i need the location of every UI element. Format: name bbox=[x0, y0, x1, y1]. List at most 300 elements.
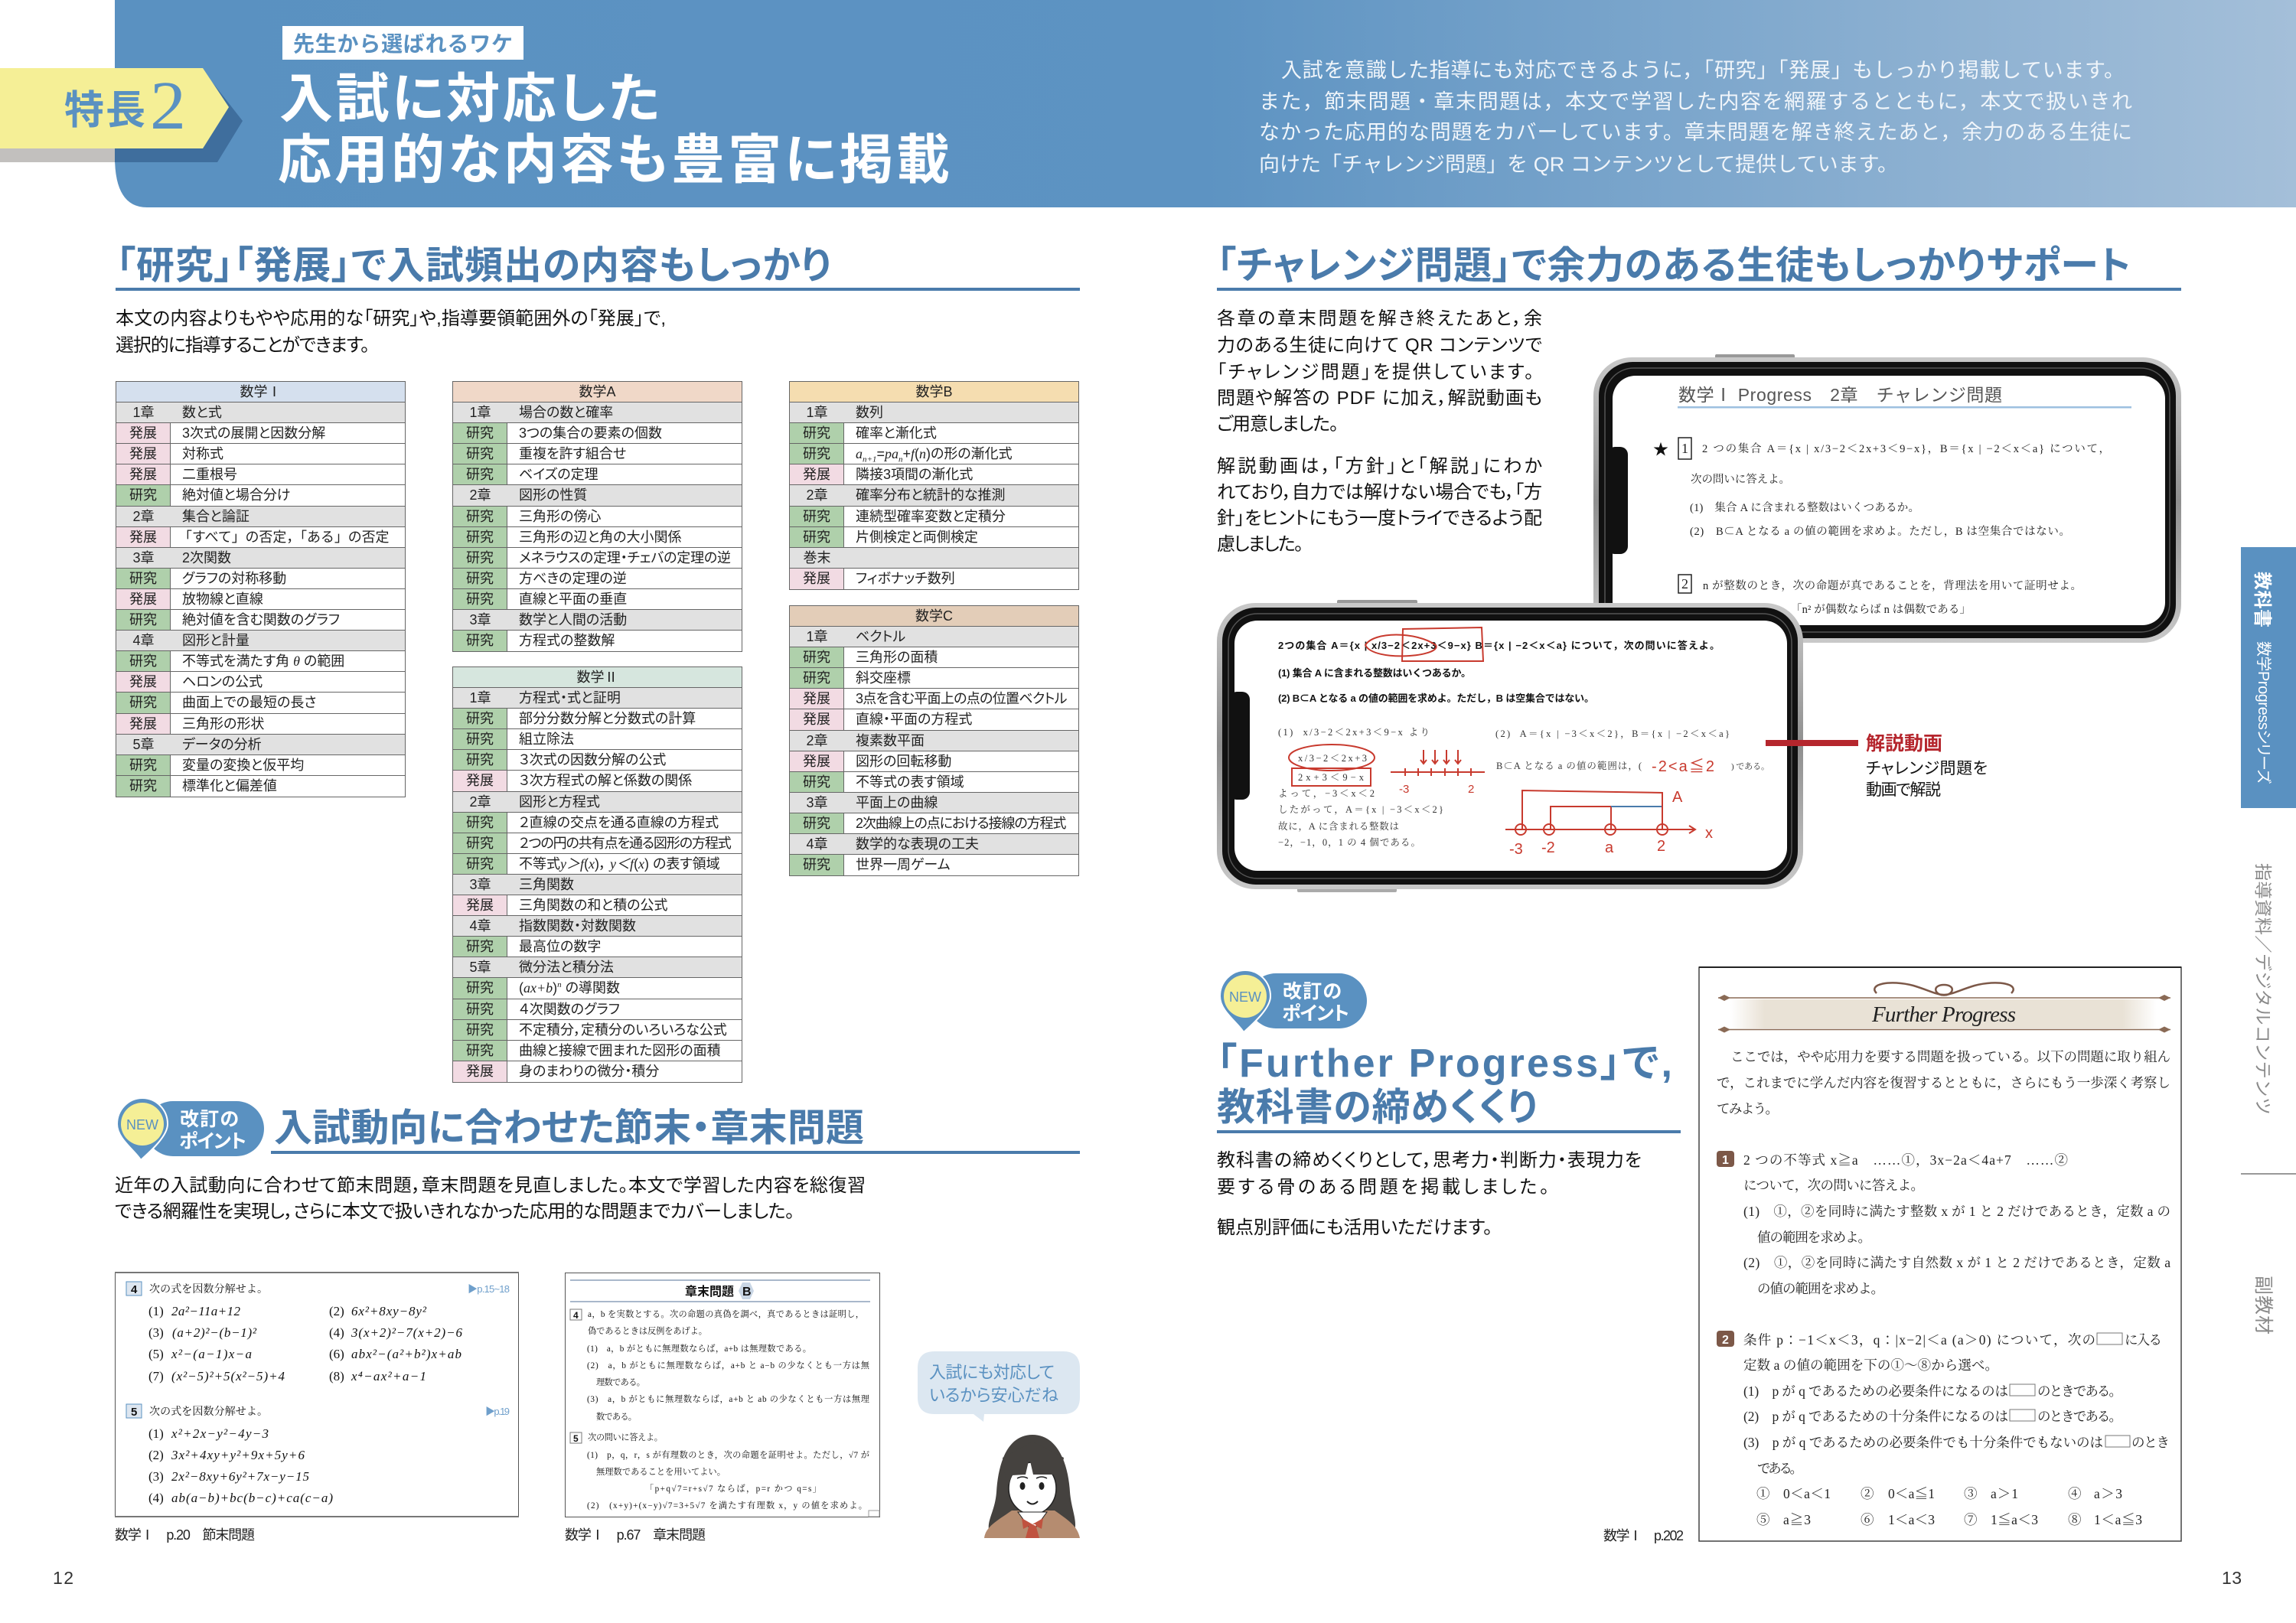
label: 先生から選ばれるワケ: 先生から選ばれるワケ bbox=[293, 32, 513, 56]
table: 数学C: 2次曲線上の点における接線の方程式 bbox=[856, 816, 1065, 831]
table: 数学II: 三角関数の和と積の公式 bbox=[519, 898, 668, 913]
problem 2: a≧3 bbox=[1783, 1512, 1811, 1527]
new badge: 改訂のポイント bbox=[117, 1098, 264, 1160]
body text: 入試動向: できる網羅性を実現し，さらに本文で扱いきれなかった応用的な問題までカバーしました。 bbox=[115, 1201, 794, 1222]
table: 数学C: 三角形の面積 bbox=[856, 650, 938, 665]
table: 数学B: 発展 bbox=[803, 571, 830, 586]
title: 応用的な内容も豊富に掲載 bbox=[278, 130, 950, 190]
screen problems: 2 つの集合 A＝{x | x/3−2＜2x+3＜9−x}，B＝{x | −2＜x＜a} について， bbox=[1702, 442, 2110, 455]
section heading: 入試動向: 入試動向に合わせた節末・章末問題 bbox=[274, 1106, 864, 1149]
table: 数学I: 放物線と直線 bbox=[182, 592, 263, 607]
screen heading: 数学Ⅰ Progress 2章 チャレンジ問題 bbox=[1678, 385, 2002, 405]
problem 2: ② bbox=[1861, 1486, 1874, 1501]
section heading: Further Progress: 「Further Progress」で, bbox=[1217, 1041, 1672, 1086]
table: 数学A: 研究 bbox=[466, 571, 494, 586]
label: 先生から選ばれるワケ bbox=[282, 26, 523, 60]
table: 数学I: 三角形の形状 bbox=[182, 716, 264, 732]
table: 数学I: 発展 bbox=[129, 425, 157, 441]
table: 数学B bbox=[789, 381, 1079, 590]
table: 数学II: 研究 bbox=[466, 939, 494, 954]
problem 2: のとき bbox=[2131, 1435, 2170, 1450]
table: 数学A: 方べきの定理の逆 bbox=[519, 571, 627, 586]
problem sheet: 章末問題: 次の問いに答えよ。 bbox=[588, 1432, 663, 1442]
table: 数学I: 発展 bbox=[129, 467, 157, 482]
table: 数学I: 対称式 bbox=[182, 446, 223, 461]
red handwritten labels: 2 bbox=[1657, 838, 1665, 855]
page number 13: 13 bbox=[2222, 1568, 2242, 1588]
header description: 向けた「チャレンジ問題」を QR コンテンツとして提供しています。 bbox=[1259, 153, 1898, 176]
table: 数学B: 1章 bbox=[806, 405, 828, 420]
table: 数学B: 研究 bbox=[803, 509, 830, 524]
problem sheet: 節末問題: (8) bbox=[329, 1369, 344, 1383]
problem sheet: 節末問題: (a+2)²−(b−1)² bbox=[172, 1325, 257, 1340]
table: 数学A: 研究 bbox=[466, 425, 494, 441]
header description: 入試を意識した指導にも対応できるように，「研究」「発展」もしっかり掲載しています。 bbox=[1281, 59, 2125, 82]
table: 数学C: 斜交座標 bbox=[856, 670, 911, 686]
phone: explanation video bbox=[1217, 600, 1803, 892]
red handwritten labels: -2<a≦2 bbox=[1652, 758, 1714, 775]
table: 数学I: 変量の変換と仮平均 bbox=[182, 758, 304, 773]
problem sheet: 章末問題: (1) a，b がともに無理数ならば，a+b は無理数である。 bbox=[587, 1343, 811, 1354]
table: 数学II: 研究 bbox=[466, 836, 494, 851]
table: 数学I: 発展 bbox=[129, 674, 157, 689]
problem sheet: 節末問題: (7) bbox=[148, 1369, 164, 1383]
table: 数学II: 4章 bbox=[469, 918, 491, 934]
problem sheet: 節末問題: 2a²−11a+12 bbox=[171, 1304, 240, 1318]
left intro text: 選択的に指導することができます。 bbox=[116, 335, 370, 356]
table: 数学A: 研究 bbox=[466, 592, 494, 607]
problem sheet: 節末問題: 5 bbox=[131, 1406, 137, 1419]
side label: 指導資料: 指導資料／デジタルコンテンツ bbox=[2253, 863, 2273, 1115]
table header: 数学C bbox=[790, 606, 1078, 627]
problem sheet: 章末問題: 偽であるときは反例をあげよ。 bbox=[588, 1325, 707, 1336]
problem sheet: 節末問題: x⁴−ax²+a−1 bbox=[351, 1369, 426, 1383]
table: 数学A: 研究 bbox=[466, 509, 494, 524]
problem sheet: 節末問題: ab(a−b)+bc(b−c)+ca(c−a) bbox=[171, 1491, 333, 1505]
table: 数学C: 世界一周ゲーム bbox=[856, 857, 951, 872]
table: 数学A: 三角形の辺と角の大小関係 bbox=[519, 530, 682, 545]
red handwritten labels: 2 bbox=[1468, 783, 1474, 796]
problem 2: ① bbox=[1756, 1486, 1769, 1501]
table: 数学I: 発展 bbox=[129, 592, 157, 607]
problem 2: (3) p が q であるための必要条件でも十分条件でもないのは bbox=[1743, 1435, 2103, 1450]
table: 数学A: 研究 bbox=[466, 467, 494, 482]
speech bubble bbox=[918, 1351, 1080, 1422]
phone: challenge problem bbox=[1593, 354, 2181, 643]
screen solution text: B⊂A となる a の値の範囲は，( bbox=[1496, 760, 1642, 771]
problem 2: (1) p が q であるための必要条件になるのは bbox=[1743, 1383, 2008, 1399]
callout: 解説動画 bbox=[1766, 733, 1988, 799]
title bbox=[278, 69, 950, 190]
body text: Further Progress bbox=[1217, 1150, 1642, 1238]
screen problems: (2) B⊂A となる a の値の範囲を求めよ。ただし，B は空集合ではない。 bbox=[1690, 524, 2070, 538]
table: 数学B: an+1=pan+f(n)の形の漸化式 bbox=[856, 446, 1013, 464]
table: 数学II: 発展 bbox=[466, 1064, 494, 1079]
problem sheet: 節末問題: 2x²−8xy+6y²+7x−y−15 bbox=[171, 1469, 309, 1484]
table: 数学A: 研究 bbox=[466, 550, 494, 565]
table: 数学II: 1章 bbox=[469, 690, 491, 706]
table: 数学II: ２直線の交点を通る直線の方程式 bbox=[519, 815, 719, 830]
table: 数学II: 研究 bbox=[466, 1043, 494, 1058]
table header: 数学A: 数学A bbox=[579, 384, 615, 399]
feature tag: 特長2: 2 bbox=[150, 68, 186, 144]
table: 数学I: 2章 bbox=[132, 509, 155, 524]
screen problems: n が整数のとき，次の命題が真であることを，背理法を用いて証明せよ。 bbox=[1703, 578, 2082, 592]
table: 数学I: 曲面上での最短の長さ bbox=[182, 695, 316, 710]
captions for problem sheets: 数学Ⅰ p.20 節末問題 bbox=[115, 1527, 255, 1543]
problem 1: 1 bbox=[1722, 1154, 1729, 1167]
table: 数学A bbox=[452, 381, 742, 652]
red handwritten labels bbox=[1399, 758, 1714, 858]
screen solution text: x/3−2＜2x+3 bbox=[1298, 753, 1367, 764]
table: 数学C: 平面上の曲線 bbox=[856, 795, 938, 810]
problem sheet: 節末問題: (4) bbox=[329, 1325, 344, 1340]
table: 数学I: 発展 bbox=[129, 716, 157, 732]
table header: 数学C: 数学C bbox=[915, 608, 953, 624]
table: 数学I: 研究 bbox=[129, 612, 157, 627]
table: 数学I: ヘロンの公式 bbox=[182, 674, 263, 689]
right intro text: 力のある生徒に向けて QR コンテンツで bbox=[1217, 335, 1542, 356]
table: 数学A: 2章 bbox=[469, 487, 491, 503]
table: 数学B: 連続型確率変数と定積分 bbox=[856, 509, 1006, 524]
problem 2: のときである。 bbox=[2037, 1383, 2122, 1399]
problem sheet: 節末問題: 4 bbox=[131, 1283, 138, 1296]
problem sheet: 章末問題: (2) a，b がともに無理数ならば，a+b と a−b の少なくとも一方は無 bbox=[587, 1360, 870, 1370]
table: 数学B: 確率分布と統計的な推測 bbox=[856, 487, 1006, 503]
table: 数学C: 発展 bbox=[803, 712, 830, 727]
problem 1: 値の範囲を求めよ。 bbox=[1757, 1230, 1871, 1245]
problem 2: 条件 p：−1＜x＜3，q：|x−2|＜a (a＞0) について，次の bbox=[1743, 1332, 2095, 1348]
table: 数学B: 研究 bbox=[803, 425, 830, 441]
problem sheet: 節末問題: (2) bbox=[148, 1448, 164, 1462]
screen solution text: よって，−3＜x＜2 bbox=[1278, 788, 1375, 799]
table: 数学II: 研究 bbox=[466, 1001, 494, 1016]
intro text: ここでは，やや応用力を要する問題を扱っている。以下の問題に取り組ん bbox=[1730, 1049, 2170, 1064]
problem 2: ⑦ bbox=[1964, 1512, 1978, 1527]
table header: 数学B bbox=[790, 382, 1078, 402]
table: 数学I: 標準化と偏差値 bbox=[182, 778, 277, 794]
new badge: 改訂のポイント: ポイント bbox=[179, 1131, 246, 1152]
table: 数学I: 3次式の展開と因数分解 bbox=[182, 425, 325, 441]
problem 2: (2) p が q であるための十分条件になるのは bbox=[1743, 1409, 2008, 1424]
table: 数学I: グラフの対称移動 bbox=[182, 571, 286, 586]
header description: なかった応用的な問題をカバーしています。章末問題を解き終えたあと，余力のある生徒に bbox=[1259, 121, 2132, 144]
problem sheet: 章末問題: 無理数であることを用いてよい。 bbox=[596, 1466, 726, 1477]
left section heading: 「研究」「発展」で入試頻出の内容もしっかり bbox=[116, 244, 831, 287]
illustration: student bbox=[984, 1435, 1080, 1538]
left intro text bbox=[116, 308, 666, 356]
table: 数学II: 研究 bbox=[466, 1022, 494, 1038]
table: 数学II: 微分法と積分法 bbox=[519, 960, 614, 975]
header description bbox=[1259, 59, 2132, 176]
right intro text: 各章の章末問題を解き終えたあと，余 bbox=[1217, 308, 1542, 329]
table: 数学II: 研究 bbox=[466, 732, 494, 747]
problem 2: ⑥ bbox=[1861, 1512, 1874, 1527]
problem sheet: 章末問題: 5 bbox=[573, 1433, 579, 1444]
new badge: right 改訂のポイント: ポイント bbox=[1282, 1003, 1349, 1025]
problem 2: ④ bbox=[2068, 1486, 2082, 1501]
screen solution text: (1) x/3−2＜2x+3＜9−x より bbox=[1278, 727, 1430, 738]
table: 数学I: 5章 bbox=[132, 737, 155, 752]
table: 数学A: 研究 bbox=[466, 446, 494, 461]
table: 数学II: 身のまわりの微分・積分 bbox=[519, 1064, 659, 1079]
table: 数学II: 研究 bbox=[466, 711, 494, 726]
problem sheet: 節末問題: (6) bbox=[329, 1347, 344, 1361]
problem 1: の値の範囲を求めよ。 bbox=[1757, 1281, 1884, 1296]
section heading: 入試動向 bbox=[271, 1106, 1080, 1154]
callout: 解説動画: 解説動画 bbox=[1866, 733, 1942, 754]
table: 数学I bbox=[116, 381, 406, 797]
new badge: right 改訂のポイント bbox=[1220, 970, 1367, 1032]
table: 数学I: 不等式を満たす角 θ の範囲 bbox=[182, 653, 344, 669]
right intro text: 慮しました。 bbox=[1217, 534, 1303, 555]
table: 数学C: 研究 bbox=[803, 774, 830, 790]
table: 数学A: 重複を許す組合せ bbox=[519, 446, 626, 461]
body text: Further Progress: 観点別評価にも活用いただけます。 bbox=[1217, 1217, 1492, 1238]
screen solution text: したがって，A＝{x | −3＜x＜2} bbox=[1278, 804, 1443, 815]
problem 2: 0＜a＜1 bbox=[1783, 1486, 1831, 1501]
table: 数学C: 複素数平面 bbox=[856, 733, 925, 748]
section heading: Further Progress: 教科書の締めくくり bbox=[1217, 1086, 1538, 1129]
table: 数学I: 1章 bbox=[132, 405, 155, 420]
screen solution text: ) である。 bbox=[1731, 761, 1769, 771]
table: 数学I: 発展 bbox=[129, 530, 157, 545]
right intro text: れており，自力では解けない場合でも，「方 bbox=[1217, 482, 1542, 503]
new badge: 改訂のポイント: 改訂の bbox=[180, 1109, 239, 1130]
screen solution text: (2) A＝{x | −3＜x＜2}，B＝{x | −2＜x＜a} bbox=[1495, 728, 1730, 739]
table: 数学B: 2章 bbox=[806, 487, 828, 503]
table: 数学II: 研究 bbox=[466, 856, 494, 872]
screen problems: 2 bbox=[1681, 576, 1688, 592]
table: 数学I: データの分析 bbox=[182, 737, 262, 752]
table: 数学I: 研究 bbox=[129, 487, 157, 503]
problem sheet: 章末問題 bbox=[565, 1273, 880, 1517]
problem 2: 1≦a＜3 bbox=[1991, 1512, 2038, 1527]
problem 1: (2) ①，②を同時に満たす自然数 x が 1 と 2 だけであるとき，定数 a bbox=[1743, 1255, 2170, 1270]
feature tag: 特長2 bbox=[0, 68, 243, 162]
problem sheet: 章末問題: 「p+q√7=r+s√7 ならば，p=r かつ q=s」 bbox=[645, 1484, 821, 1494]
table: 数学A: 数学と人間の活動 bbox=[519, 612, 627, 627]
problem 1 bbox=[1717, 1151, 2170, 1296]
red handwritten labels: -3 bbox=[1509, 841, 1523, 858]
table: 数学C: 2章 bbox=[806, 733, 828, 748]
feature tag: 特長2: 特長 bbox=[64, 89, 145, 133]
problem sheet: 章末問題: 4 bbox=[573, 1310, 579, 1321]
table: 数学II: 研究 bbox=[466, 980, 494, 996]
table: 数学I: 絶対値と場合分け bbox=[182, 487, 290, 503]
table: 数学A: 1章 bbox=[469, 405, 491, 420]
header banner bbox=[115, 0, 2296, 207]
table: 数学I: 研究 bbox=[129, 695, 157, 710]
screen problems bbox=[1653, 438, 2110, 616]
red handwritten labels: a bbox=[1605, 839, 1614, 856]
table: 数学I: 数と式 bbox=[182, 405, 222, 420]
table: 数学II: 三角関数 bbox=[519, 877, 574, 892]
problem sheet: 節末問題 bbox=[115, 1272, 519, 1517]
table: 数学II: 3章 bbox=[469, 877, 491, 892]
screen solution text: 2x+3＜9−x bbox=[1298, 772, 1365, 783]
body text: 入試動向: 近年の入試動向に合わせて節末問題，章末問題を見直しました。本文で学習した内容を総復習 bbox=[115, 1175, 866, 1196]
captions for problem sheets: 数学Ⅰ p.67 章末問題 bbox=[565, 1527, 706, 1543]
side tab: 教科書: 数学Progressシリーズ bbox=[2255, 641, 2272, 784]
table: 数学I: 研究 bbox=[129, 653, 157, 669]
table: 数学B: 研究 bbox=[803, 446, 830, 461]
table: 数学I: 研究 bbox=[129, 571, 157, 586]
table: 数学A: 方程式の整数解 bbox=[519, 633, 615, 648]
problem sheet: 節末問題: (1) bbox=[148, 1426, 164, 1441]
problem sheet: 章末問題: 理数である。 bbox=[596, 1377, 645, 1387]
table: 数学B: 研究 bbox=[803, 530, 830, 545]
problem sheet: 節末問題: 3(x+2)²−7(x+2)−6 bbox=[351, 1325, 462, 1340]
problem sheet: 章末問題: 章末問題 bbox=[685, 1284, 734, 1299]
page number 12: 12 bbox=[53, 1568, 73, 1588]
table header: 数学II bbox=[453, 667, 742, 688]
table: 数学C: 3点を含む平面上の点の位置ベクトル bbox=[856, 691, 1067, 706]
table: 数学II: (ax+b)n の導関数 bbox=[519, 980, 620, 996]
problem sheet: 章末問題: (1) p，q，r，s が有理数のとき，次の命題を証明せよ。ただし，√7 が bbox=[587, 1449, 869, 1460]
left intro text: 本文の内容よりもやや応用的な「研究」や,指導要領範囲外の「発展」で, bbox=[116, 308, 666, 329]
right intro text: 「チャレンジ問題」を提供しています。 bbox=[1217, 362, 1534, 383]
table: 数学II: 組立除法 bbox=[519, 732, 574, 747]
table: 数学A: ベイズの定理 bbox=[519, 467, 598, 482]
red handwritten labels: -3 bbox=[1399, 783, 1409, 796]
table: 数学II: 5章 bbox=[469, 960, 491, 975]
table: 数学II: 不定積分，定積分のいろいろな公式 bbox=[519, 1022, 727, 1038]
table: 数学C: 1章 bbox=[806, 629, 828, 644]
screen solution text: −2，−1，0，1 の 4 個である。 bbox=[1278, 837, 1420, 848]
table: 数学II: ３次方程式の解と係数の関係 bbox=[519, 773, 692, 788]
screen problems: ★ bbox=[1653, 442, 1668, 458]
table: 数学B: フィボナッチ数列 bbox=[856, 571, 955, 586]
red handwritten labels: A bbox=[1672, 789, 1683, 806]
header description: また，節末問題・章末問題は，本文で学習した内容を網羅するとともに，本文で扱いきれ bbox=[1259, 90, 2132, 113]
problem sheet: 節末問題: x²−(a−1)x−a bbox=[171, 1347, 252, 1361]
table: 数学I: 二重根号 bbox=[182, 467, 237, 482]
table: 数学II: ４次関数のグラフ bbox=[519, 1001, 620, 1016]
table: 数学C: 発展 bbox=[803, 754, 830, 769]
captions for problem sheets bbox=[115, 1527, 706, 1543]
problem 2: 0＜a≦1 bbox=[1888, 1486, 1935, 1501]
table: 数学C: 研究 bbox=[803, 816, 830, 831]
screen solution text bbox=[1278, 727, 1769, 848]
screen problem statement: (2) B⊂A となる a の値の範囲を求めよ。ただし，B は空集合ではない。 bbox=[1278, 693, 1594, 704]
screen problems: 1 bbox=[1681, 441, 1688, 456]
problem sheet: 節末問題: 3x²+4xy+y²+9x+5y+6 bbox=[171, 1448, 305, 1462]
right intro text: 解説動画は，「方針」と「解説」にわか bbox=[1217, 456, 1542, 477]
table: 数学C: 図形の回転移動 bbox=[856, 754, 951, 769]
problem 2: である。 bbox=[1757, 1461, 1803, 1476]
table: 数学A: メネラウスの定理・チェバの定理の逆 bbox=[519, 550, 731, 565]
problem 2: a＞3 bbox=[2094, 1486, 2122, 1501]
screen problem statement: 2つの集合 A＝{x | x/3−2＜2x+3＜9−x} B＝{x | −2＜x＜a} について，次の問いに答えよ。 bbox=[1278, 640, 1720, 651]
table: 数学II: 最高位の数字 bbox=[519, 939, 601, 954]
table: 数学A: 直線と平面の垂直 bbox=[519, 592, 627, 607]
problem 2: 1＜a＜3 bbox=[1888, 1512, 1935, 1527]
table: 数学I: 研究 bbox=[129, 758, 157, 773]
body text: 入試動向 bbox=[115, 1175, 866, 1222]
problem 2: 定数 a の値の範囲を下の①〜⑧から選べ。 bbox=[1743, 1357, 1998, 1373]
table: 数学B: 発展 bbox=[803, 467, 830, 482]
table: 数学II: 研究 bbox=[466, 752, 494, 768]
table: 数学C: 不等式の表す領域 bbox=[856, 774, 964, 790]
problem sheet: 節末問題: x²+2x−y²−4y−3 bbox=[171, 1426, 269, 1441]
table: 数学C bbox=[789, 605, 1079, 876]
table: 数学C: 直線・平面の方程式 bbox=[856, 712, 972, 727]
table: 数学II bbox=[452, 666, 742, 1083]
table: 数学A: 研究 bbox=[466, 530, 494, 545]
callout: 解説動画: 動画で解説 bbox=[1866, 781, 1941, 799]
problem sheet: 節末問題: (x²−5)²+5(x²−5)+4 bbox=[171, 1369, 285, 1383]
table: 数学A: 図形の性質 bbox=[519, 487, 587, 503]
table: 数学I: 4章 bbox=[132, 633, 155, 648]
screen problems: 次の問いに答えよ。 bbox=[1691, 473, 1790, 486]
table header: 数学II: 数学Ⅱ bbox=[577, 670, 618, 685]
problem sheet: 章末問題: 数である。 bbox=[596, 1411, 637, 1422]
problem 2: ③ bbox=[1964, 1486, 1978, 1501]
problem sheet: 章末問題: a，b を実数とする。次の命題の真偽を調べ，真であるときは証明し， bbox=[588, 1309, 864, 1319]
right intro text bbox=[1217, 308, 1542, 555]
table: 数学I: 集合と論証 bbox=[182, 509, 249, 524]
problem sheet: 節末問題: (4) bbox=[148, 1491, 164, 1505]
table: 数学A: 3章 bbox=[469, 612, 491, 627]
table: 数学II: 発展 bbox=[466, 898, 494, 913]
table: 数学C: 研究 bbox=[803, 857, 830, 872]
table: 数学A: 三角形の傍心 bbox=[519, 509, 601, 524]
body text: Further Progress: 教科書の締めくくりとして，思考力・判断力・表現力を bbox=[1217, 1150, 1642, 1171]
table: 数学C: 3章 bbox=[806, 795, 828, 810]
table header: 数学B: 数学B bbox=[915, 384, 952, 399]
speech bubble: いるから安心だね bbox=[929, 1386, 1058, 1405]
right intro text: 問題や解答の PDF に加え，解説動画も bbox=[1217, 388, 1542, 409]
new badge: right 改訂のポイント: 改訂の bbox=[1283, 981, 1342, 1002]
table: 数学I: 図形と計量 bbox=[182, 633, 249, 648]
red handwritten labels: x bbox=[1705, 825, 1713, 842]
side tab: 教科書 bbox=[2241, 547, 2296, 808]
intro text: てみよう。 bbox=[1717, 1101, 1779, 1116]
table: 数学B: 片側検定と両側検定 bbox=[856, 530, 978, 545]
screen problem statement bbox=[1278, 640, 1720, 704]
problem sheet: Further Progress bbox=[1699, 966, 2181, 1541]
table: 数学B: 確率と漸化式 bbox=[856, 425, 937, 441]
problem sheet: 節末問題: (1) bbox=[148, 1304, 164, 1318]
table header: 数学I: 数学Ⅰ bbox=[240, 384, 282, 399]
table: 数学II: ３次式の因数分解の公式 bbox=[519, 752, 666, 768]
body text: Further Progress: 要する骨のある問題を掲載しました。 bbox=[1217, 1177, 1549, 1198]
callout: 解説動画: チャレンジ問題を bbox=[1866, 760, 1988, 777]
table: 数学I: 絶対値を含む関数のグラフ bbox=[182, 612, 340, 627]
table: 数学C: ベクトル bbox=[856, 629, 905, 644]
problem 2: ⑤ bbox=[1756, 1512, 1769, 1527]
caption: p.202: 数学Ⅰ p.202 bbox=[1603, 1528, 1684, 1543]
table: 数学C: 4章 bbox=[806, 836, 828, 852]
screen problems: (1) 集合 A に含まれる整数はいくつあるか。 bbox=[1690, 500, 1919, 514]
table: 数学A: 3つの集合の要素の個数 bbox=[519, 425, 662, 441]
problem sheet: 節末問題: (5) bbox=[148, 1347, 164, 1361]
intro text: で，これまでに学んだ内容を復習するとともに，さらにもう一歩深く考察し bbox=[1717, 1075, 2170, 1090]
problem sheet: 節末問題: (2) bbox=[329, 1304, 344, 1318]
table: 数学I: 3章 bbox=[132, 550, 155, 565]
table: 数学B: 巻末 bbox=[804, 550, 831, 565]
side label: 副教材: 副教材 bbox=[2252, 1276, 2274, 1335]
problem 2: 2 bbox=[1722, 1334, 1729, 1347]
new badge: right 改訂のポイント: NEW bbox=[1229, 989, 1261, 1005]
table: 数学A: 研究 bbox=[466, 633, 494, 648]
problem sheet: 節末問題: 次の式を因数分解せよ。 bbox=[149, 1405, 268, 1418]
table: 数学I: 2次関数 bbox=[182, 550, 231, 565]
table: 数学B: 数列 bbox=[856, 405, 883, 420]
problem sheet: 章末問題: (3) a，b がともに無理数ならば，a+b と ab の少なくとも一方は無理 bbox=[587, 1393, 869, 1404]
section heading: Further Progress bbox=[1217, 1041, 1681, 1133]
